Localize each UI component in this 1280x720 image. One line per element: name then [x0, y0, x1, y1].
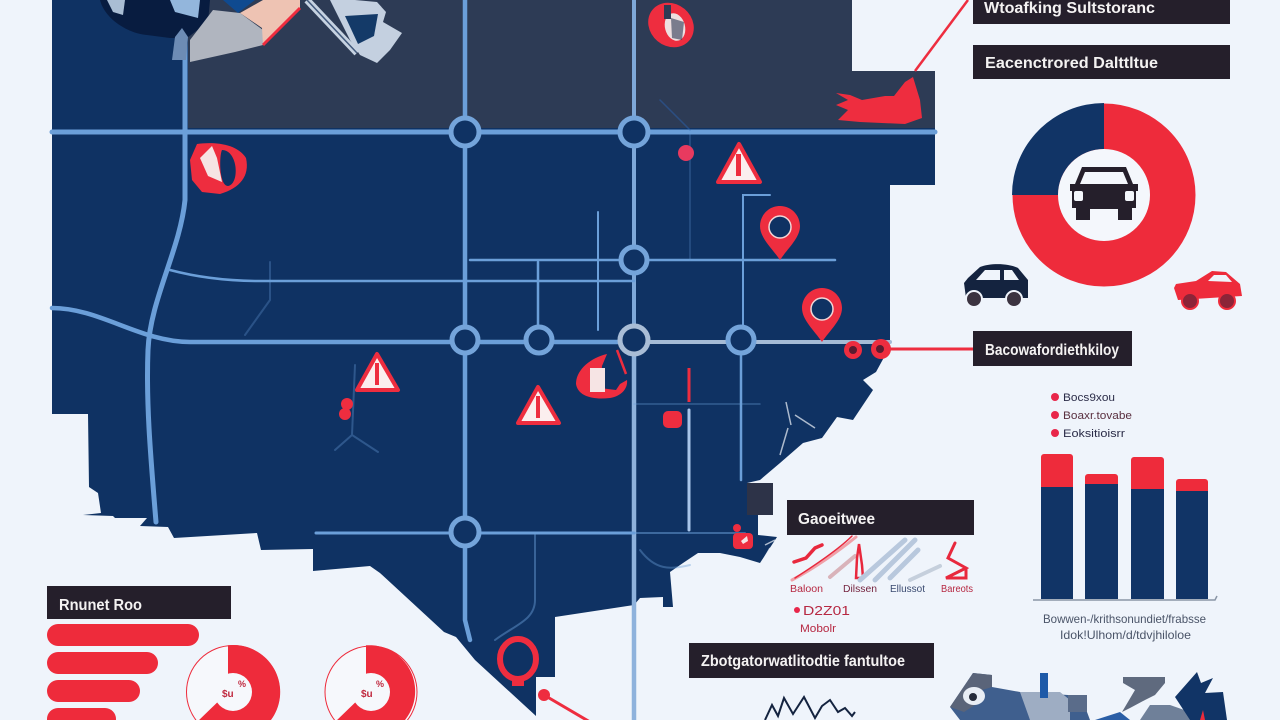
- icon: top wreck marker: [639, 0, 703, 57]
- chart caption: Idok!Ulhom/d/tdvjhiloloe: [1060, 628, 1191, 642]
- icon: car front: [1070, 167, 1138, 220]
- trend slopes: [792, 536, 966, 580]
- icon: crescent hotspot: [576, 350, 689, 402]
- trend labels: Baloon: [790, 584, 823, 595]
- trend labels: Ellussot: [890, 584, 925, 595]
- icon: red car: [1174, 271, 1242, 309]
- road network: [52, 0, 935, 720]
- icon: hotspot south east: [733, 524, 753, 549]
- icon: small hotspot west: [339, 398, 353, 420]
- icon: small hotspot centre: [663, 411, 682, 428]
- panel: working substance header: Wtoafking Sultstoranc: [984, 0, 1155, 17]
- chart caption: [1043, 612, 1206, 642]
- mini region map: [950, 672, 1227, 720]
- trend labels: [790, 584, 973, 595]
- icon: wrench damage shape: [836, 77, 922, 124]
- callout line south: [538, 689, 590, 720]
- icon: south location ring: [500, 639, 536, 686]
- donut chart: vehicle share: [1012, 103, 1172, 264]
- chart caption: Bowwen-/krithsonundiet/frabsse: [1043, 612, 1206, 626]
- icon: small hotspot: [678, 145, 694, 161]
- horizontal bars: [47, 624, 199, 720]
- note: small figure: Mobolr: [800, 623, 836, 635]
- map territory: [52, 0, 935, 716]
- pie chart left: %: [238, 679, 246, 689]
- chart legend: Boaxr.tovabe: [1063, 410, 1132, 422]
- pie chart left: $u: [222, 689, 234, 700]
- pie chart right: %: [376, 679, 384, 689]
- trend labels: Bareots: [941, 584, 973, 595]
- icon: navy car: [964, 264, 1028, 307]
- pie chart right: $u: [361, 689, 373, 700]
- pie chart left: [186, 645, 280, 720]
- panel: event trend header: [973, 45, 1230, 79]
- dark slate northern zone: [188, 0, 935, 128]
- panel: left header: [47, 586, 231, 619]
- icon: hotspots at callout: [844, 339, 891, 359]
- icon: hotspot west: [190, 143, 247, 194]
- note: small figure: [794, 603, 850, 635]
- panel: timeline header: [689, 643, 934, 678]
- panel: road map: [52, 0, 973, 720]
- callout line to panel: [888, 348, 973, 350]
- icon: warning triangle centre: [518, 387, 559, 423]
- panel: bar section header: Bacowafordiethkiloy: [985, 342, 1119, 359]
- panel: event trend header: Eacenctrored Dalttltue: [985, 55, 1158, 72]
- icon: warning triangle north east: [718, 144, 760, 182]
- chart legend: [1051, 392, 1132, 440]
- panel: trends header: [787, 500, 974, 535]
- panel: bar section header: [973, 331, 1132, 366]
- icon: warning triangle west: [357, 354, 398, 390]
- chart legend: Bocs9xou: [1063, 392, 1115, 404]
- panel: timeline header: Zbotgatorwatlitodtie fantultoe: [701, 653, 905, 670]
- panel: working substance header: [973, 0, 1230, 24]
- panel: trends header: Gaoeitwee: [798, 511, 875, 528]
- illustration: crash scene: [100, 0, 402, 63]
- chart legend: Eoksitioisrr: [1063, 428, 1125, 440]
- pie chart right: [325, 645, 417, 720]
- note: small figure: D2Z01: [803, 603, 850, 618]
- coastal inlets: [762, 402, 815, 562]
- icon: location pin lower: [802, 288, 842, 342]
- panel: left header: Rnunet Roo: [59, 597, 142, 614]
- dark block: [747, 483, 773, 515]
- callout line to working panel: [915, 0, 968, 71]
- icon: location pin upper: [760, 206, 800, 260]
- stacked bar chart: [1033, 454, 1217, 600]
- line chart: [765, 697, 855, 720]
- road junction rings: [451, 118, 754, 546]
- trend labels: Dilssen: [843, 584, 877, 595]
